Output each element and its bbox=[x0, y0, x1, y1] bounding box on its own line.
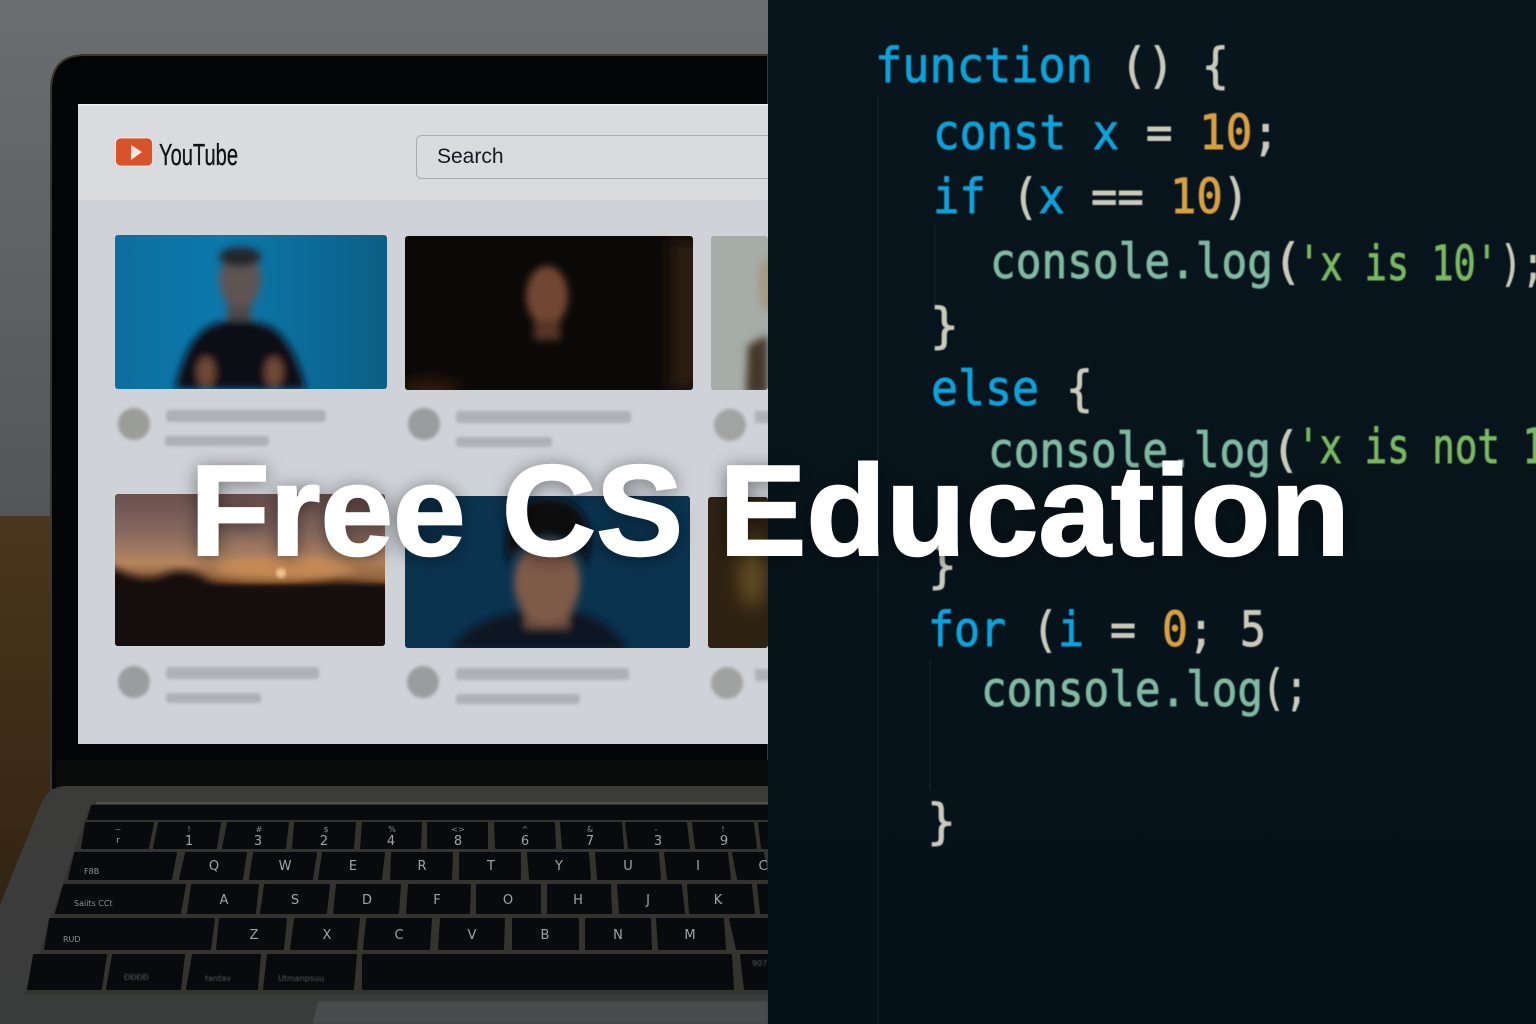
key labels: 3 bbox=[254, 834, 262, 849]
line 7: ( bbox=[1271, 422, 1300, 478]
key labels: S bbox=[291, 893, 299, 908]
key labels bbox=[63, 825, 768, 983]
key labels: Utmanpsuu bbox=[278, 974, 324, 983]
video thumbnail 1 bbox=[115, 235, 387, 389]
line 3: if (x == 10) bbox=[933, 169, 1249, 225]
key labels: Q bbox=[209, 859, 219, 874]
key labels: E bbox=[349, 859, 357, 874]
key labels: 6 bbox=[521, 834, 529, 849]
key labels: O bbox=[503, 893, 513, 908]
key labels: Y bbox=[554, 859, 563, 874]
key labels: 9 bbox=[720, 834, 728, 849]
laptop keyboard deck bbox=[0, 786, 768, 1024]
key labels: R bbox=[417, 859, 427, 874]
key labels: H bbox=[573, 893, 583, 908]
key labels: N bbox=[613, 928, 623, 943]
key labels: M bbox=[684, 928, 696, 943]
key labels: W bbox=[279, 859, 292, 874]
video meta placeholders bbox=[118, 408, 775, 704]
line 10: (; bbox=[1262, 660, 1308, 716]
key labels: % bbox=[388, 825, 396, 834]
line 1: function () { bbox=[875, 38, 1229, 94]
video thumbnail 2 bbox=[400, 236, 700, 398]
key labels: C bbox=[758, 859, 768, 874]
search box: Search bbox=[437, 145, 504, 168]
laptop screen bbox=[78, 104, 796, 744]
youtube logo: YouTube bbox=[159, 137, 238, 172]
video thumbnail 3 bbox=[711, 236, 768, 390]
key labels: r bbox=[116, 836, 120, 846]
line 6: else { bbox=[931, 361, 1093, 417]
laptop lid bbox=[51, 55, 768, 790]
key labels: ĐĐĐĐ bbox=[124, 973, 149, 982]
key labels: $ bbox=[323, 825, 329, 834]
key labels: ! bbox=[187, 825, 191, 834]
indent guides bbox=[877, 258, 936, 1024]
key labels: # bbox=[256, 825, 263, 834]
key labels: 4 bbox=[387, 834, 395, 849]
key labels: Saiits CCt bbox=[74, 899, 113, 908]
line 10: console.log bbox=[981, 662, 1263, 718]
key labels: tantav bbox=[205, 974, 231, 983]
key labels: RUD bbox=[63, 935, 81, 944]
key labels: 8 bbox=[454, 834, 462, 849]
line 4: ( bbox=[1273, 234, 1302, 290]
panel: laptop photo bbox=[0, 0, 796, 1024]
key labels: B bbox=[541, 928, 549, 943]
key labels: <> bbox=[451, 825, 465, 834]
youtube logo bbox=[115, 138, 238, 166]
key labels: 2 bbox=[320, 834, 328, 849]
line 7: console.log bbox=[988, 423, 1271, 479]
line 9: for (i = 0; 5 bbox=[928, 602, 1266, 658]
line 4 bbox=[992, 240, 1536, 290]
key labels: Z bbox=[250, 928, 259, 943]
key labels: F8B bbox=[84, 867, 99, 876]
line 8: } bbox=[928, 538, 957, 594]
keyboard keys bbox=[28, 806, 777, 989]
key labels: X bbox=[323, 928, 332, 943]
key labels: 907 bbox=[752, 959, 767, 968]
key labels: - bbox=[655, 825, 658, 834]
line 7 bbox=[990, 425, 1536, 478]
line 5: } bbox=[930, 298, 959, 354]
key labels: ~ bbox=[115, 825, 121, 834]
key labels: F bbox=[433, 893, 441, 908]
video thumbnail 5 bbox=[405, 496, 690, 650]
key labels: C bbox=[394, 928, 404, 943]
key labels: J bbox=[645, 893, 650, 908]
key labels: A bbox=[220, 893, 229, 908]
key labels: 3 bbox=[654, 834, 662, 849]
key labels: 1 bbox=[185, 834, 193, 849]
key labels: U bbox=[623, 859, 633, 874]
key labels: I bbox=[696, 859, 700, 874]
search box bbox=[416, 136, 796, 178]
key labels: K bbox=[714, 893, 723, 908]
video thumbnail 4 bbox=[115, 494, 385, 646]
key labels: T bbox=[486, 859, 495, 874]
key labels: 7 bbox=[586, 834, 594, 849]
line 4: console.log bbox=[990, 234, 1273, 290]
key labels: V bbox=[468, 928, 477, 943]
key labels: ^ bbox=[522, 825, 528, 834]
video thumbnail 6 bbox=[708, 497, 768, 648]
key labels: & bbox=[587, 825, 593, 834]
title: Free CS Education bbox=[190, 439, 1350, 583]
trackpad bbox=[312, 1001, 768, 1024]
key labels: D bbox=[362, 893, 372, 908]
panel: code editor bbox=[768, 0, 1536, 1024]
line 11: } bbox=[927, 794, 956, 850]
line 2: const x = 10; bbox=[933, 105, 1279, 161]
key labels: ! bbox=[721, 825, 725, 834]
code lines bbox=[875, 38, 1536, 850]
